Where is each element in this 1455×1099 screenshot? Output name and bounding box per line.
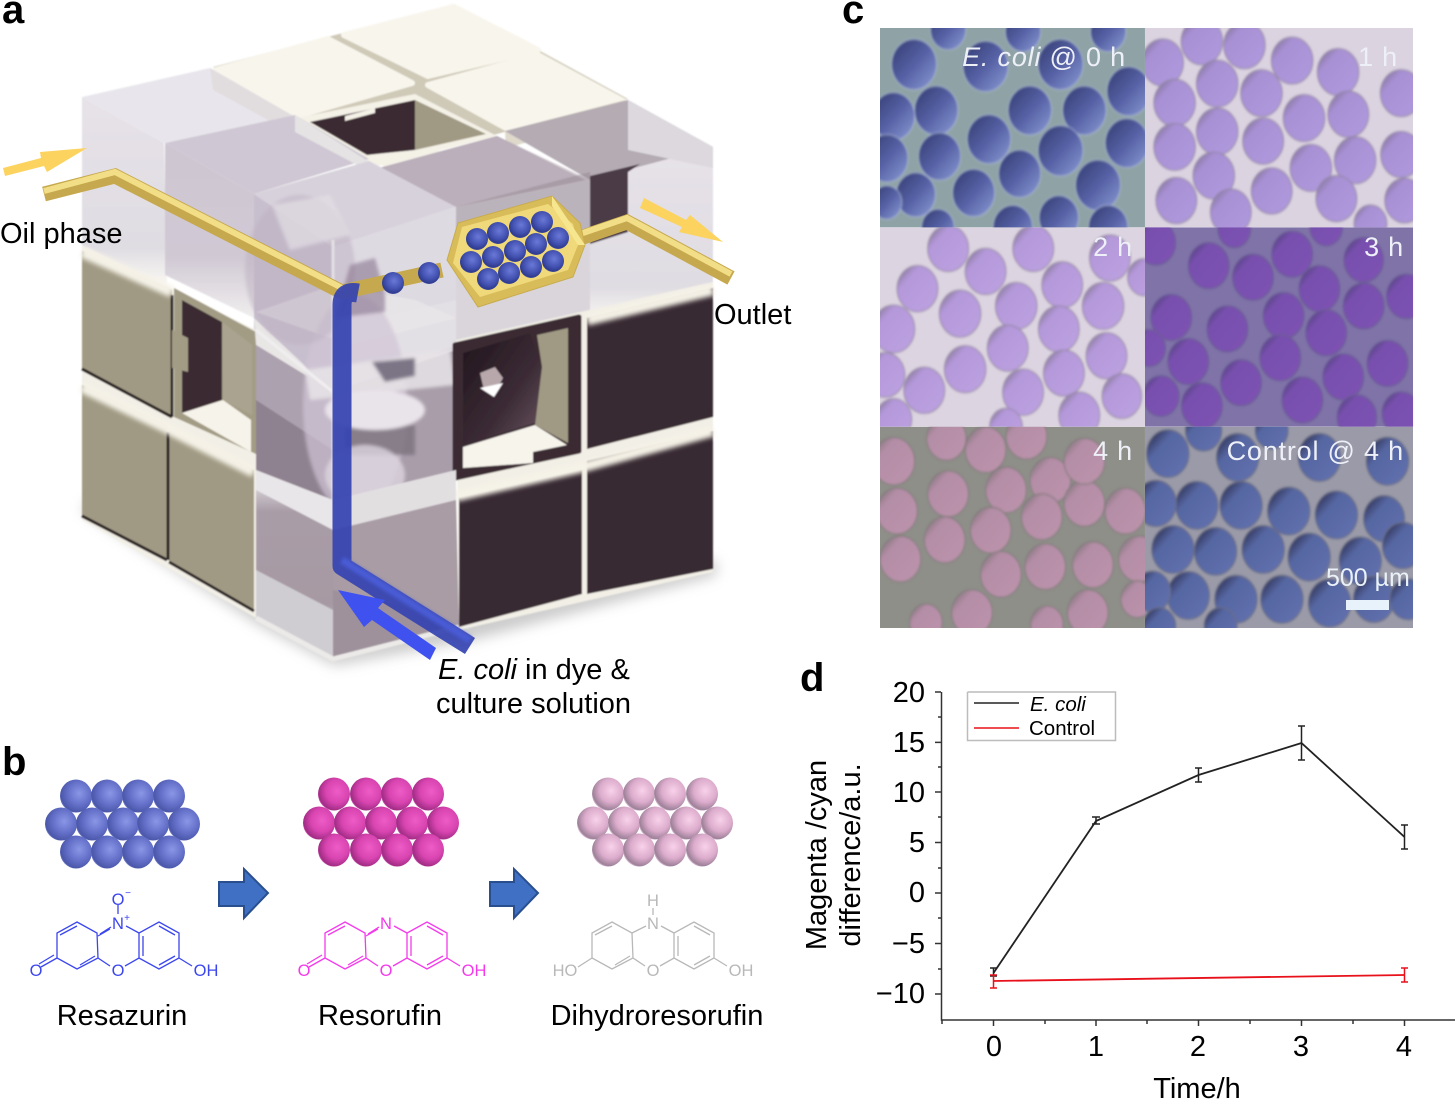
panel label d: d	[800, 656, 824, 700]
droplets resorufin	[303, 778, 459, 866]
E. coli series	[990, 726, 1408, 976]
tan left tiles	[82, 251, 254, 611]
name labels: Resazurin	[57, 1000, 187, 1032]
y tick labels: 10	[893, 777, 925, 809]
name labels: Dihydroresorufin	[551, 1000, 763, 1032]
droplets resazurin	[45, 780, 200, 868]
structure resorufin: O	[298, 962, 311, 980]
y tick labels: −5	[892, 928, 925, 960]
tile 3 h	[1145, 227, 1414, 427]
structure resazurin: +	[124, 913, 130, 924]
structure dihydroresorufin: O	[647, 962, 660, 980]
label sample: E. coli in dye &	[438, 654, 630, 686]
time labels: Control @ 4 h	[1227, 436, 1404, 466]
top backing	[213, 4, 628, 166]
name labels: Resorufin	[318, 1000, 442, 1032]
control series	[990, 968, 1408, 988]
arrow: sample in	[338, 590, 436, 660]
ghost cubies upper row	[82, 68, 713, 392]
time labels	[962, 42, 1404, 466]
x tick labels: 3	[1293, 1031, 1309, 1063]
dark right tiles	[459, 288, 713, 627]
tile 0 h	[880, 28, 1145, 228]
block arrow 1	[219, 869, 268, 918]
structure resorufin: N	[380, 915, 392, 933]
right hole	[455, 317, 579, 478]
y tick labels: −10	[876, 978, 925, 1010]
ghost cubies middle	[245, 195, 456, 650]
structure resorufin	[298, 915, 486, 980]
structure dihydroresorufin: HO	[553, 962, 578, 980]
y axis title	[801, 760, 867, 950]
label outlet: Outlet	[714, 299, 791, 331]
x tick labels: 4	[1396, 1031, 1412, 1063]
legend: E. coli	[1030, 693, 1087, 716]
cube shadow	[82, 500, 716, 665]
structure resazurin: −	[125, 888, 131, 899]
y axis title: Magenta /cyan	[801, 760, 833, 950]
tile control 4 h	[1145, 426, 1414, 628]
cream tile top bands	[82, 252, 713, 496]
time labels: 1 h	[1358, 42, 1398, 72]
y tick labels: 15	[893, 727, 925, 759]
droplet generation chamber	[447, 196, 585, 307]
top hole	[297, 94, 497, 170]
x tick labels: 0	[986, 1031, 1002, 1063]
x tick labels: 2	[1190, 1031, 1206, 1063]
structure resazurin: O	[30, 962, 43, 980]
oil phase yellow tube	[44, 172, 731, 292]
front bottom ghost cubies	[256, 470, 459, 659]
y tick labels: 5	[909, 827, 925, 859]
panel c: micrograph grid	[842, 0, 1426, 645]
cube body	[82, 4, 713, 659]
y tick labels: 20	[893, 677, 925, 709]
time labels: 4 h	[1093, 436, 1133, 466]
x tick labels	[986, 1031, 1412, 1063]
structure dihydroresorufin	[553, 892, 753, 980]
time labels: 2 h	[1093, 232, 1133, 262]
time labels: 3 h	[1364, 232, 1404, 262]
panel d: line chart	[800, 656, 1455, 1099]
structure dihydroresorufin: N	[647, 915, 659, 933]
y axis title: difference/a.u.	[835, 763, 867, 947]
structure resazurin: OH	[194, 962, 218, 980]
cream backing of lower faces	[82, 245, 713, 630]
block arrow 2	[490, 869, 538, 918]
bottom rim of cube	[256, 618, 459, 659]
x tick labels: 1	[1088, 1031, 1104, 1063]
scale bar label: 500 µm	[1326, 564, 1410, 592]
structure dihydroresorufin: H	[647, 892, 659, 910]
structure resorufin: O	[380, 962, 393, 980]
micrographs	[865, 10, 1426, 645]
structure resazurin: N	[112, 915, 124, 933]
y tick labels: 0	[909, 877, 925, 909]
structure resazurin: O	[112, 962, 125, 980]
time labels: E. coli @ 0 h	[962, 42, 1126, 72]
structure dihydroresorufin: OH	[729, 962, 753, 980]
label oil phase: Oil phase	[0, 218, 123, 250]
panel label b: b	[2, 740, 26, 784]
axes	[935, 692, 1455, 1026]
legend	[968, 692, 1116, 740]
structure resazurin	[30, 888, 218, 980]
left hole	[172, 288, 256, 454]
structure resazurin: O	[112, 891, 125, 909]
panel b: dye reduction scheme	[2, 740, 763, 1032]
structure resorufin: OH	[462, 962, 486, 980]
arrow: outlet	[640, 198, 723, 242]
tile 4 h	[880, 426, 1145, 628]
arrow: oil in	[3, 148, 87, 176]
legend: Control	[1029, 717, 1095, 740]
scale bar	[1346, 600, 1389, 610]
droplets in chamber	[460, 211, 569, 290]
tile 2 h	[880, 227, 1145, 427]
panel a: 3D cube microfluidic device	[0, 0, 791, 720]
top tile side shading	[213, 72, 625, 148]
internal lens shapes	[245, 195, 455, 515]
droplets in channel	[382, 262, 440, 294]
droplets dihydroresorufin	[577, 778, 733, 866]
y tick labels	[876, 677, 925, 1010]
tile dark edges	[82, 295, 254, 611]
sample blue tube	[342, 292, 470, 646]
name labels	[57, 1000, 763, 1032]
opaque top tiles	[216, 7, 625, 128]
tile 1 h	[1145, 28, 1413, 228]
label sample: culture solution	[436, 688, 631, 720]
